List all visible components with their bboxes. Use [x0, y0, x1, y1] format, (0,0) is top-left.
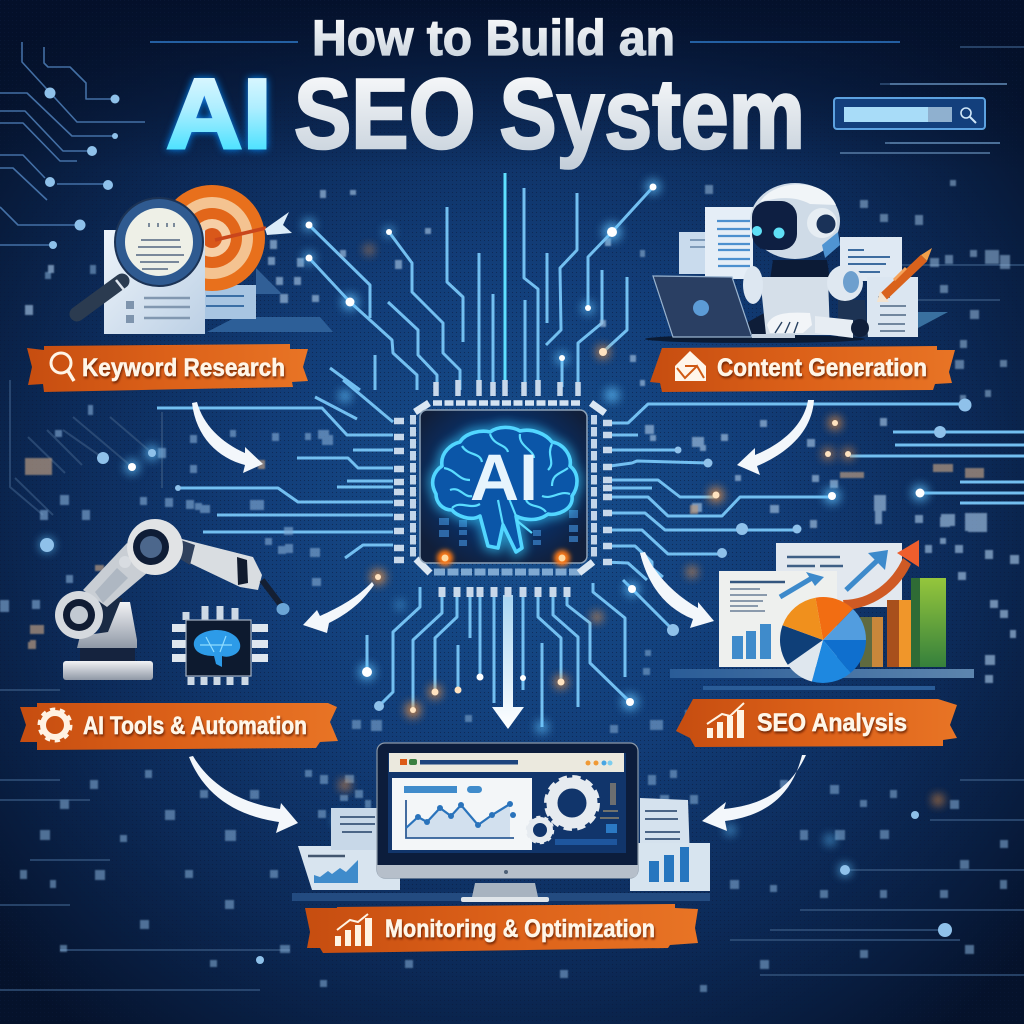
- data blocks inside chip: [439, 510, 578, 549]
- gears: [528, 778, 597, 842]
- arrow: chip to monitoring: [492, 595, 524, 729]
- icon: monitor with dashboards: [292, 743, 710, 902]
- icon: search: [51, 353, 74, 381]
- robot head: [750, 183, 840, 259]
- connector arrows: [189, 400, 814, 833]
- chip pins: [394, 380, 612, 597]
- arrow: chip to AI tools: [303, 582, 374, 633]
- icon: growth chart: [707, 703, 744, 738]
- arrow: chip to SEO analysis: [640, 552, 714, 628]
- robot body: [743, 260, 869, 338]
- icon: robot with laptop: [645, 183, 948, 343]
- label: keyword research: Keyword Research: [82, 354, 285, 382]
- icon: gear: [40, 710, 70, 740]
- banner: content generation: [650, 346, 955, 392]
- data particles: [0, 180, 1019, 992]
- panel: SEO analysis: [670, 540, 974, 747]
- arrow: AI tools to monitoring: [189, 756, 298, 833]
- banner: keyword research: [27, 344, 308, 392]
- label: monitoring and optimization: Monitoring & Optimization: [385, 915, 655, 943]
- title: AI SEO System: AI: [166, 58, 272, 169]
- banner: monitoring and optimization: [305, 904, 698, 953]
- icon: envelope: [675, 351, 706, 381]
- glowing nodes: [40, 88, 972, 964]
- panel: keyword research: [27, 185, 333, 392]
- banner: SEO analysis: [676, 699, 957, 747]
- icon: mini AI chip: [172, 606, 268, 685]
- label: content generation: Content Generation: [717, 354, 927, 382]
- panel: monitoring and optimization: [292, 743, 710, 953]
- chip pad ring: [413, 403, 605, 573]
- arrow: keyword research to chip: [192, 402, 263, 473]
- label: AI tools and automation: AI Tools & Automation: [83, 712, 307, 740]
- icon: reports, pie chart and bars: [670, 540, 974, 688]
- label: SEO analysis: SEO Analysis: [757, 709, 907, 737]
- panel: AI tools and automation: [20, 519, 338, 750]
- AI letters on chip: AI: [470, 440, 538, 514]
- central AI chip: [394, 380, 612, 597]
- chip orange lights: [437, 550, 570, 566]
- title: How to Build an: How to Build an: [312, 10, 675, 66]
- search bar icon: [834, 84, 1007, 153]
- icon: growth chart: [335, 914, 372, 946]
- laptop: [653, 276, 795, 338]
- arrow: content generation to chip: [737, 400, 814, 475]
- icon: robot arm with chip: [55, 519, 290, 680]
- pencil: [877, 248, 932, 302]
- banner: AI tools and automation: [20, 703, 338, 750]
- brain: [433, 427, 577, 552]
- title: AI SEO System: SEO System: [294, 58, 805, 169]
- chip core: [420, 410, 587, 563]
- icon: target and magnifier: [77, 185, 333, 334]
- pie chart: [780, 597, 866, 683]
- panel: content generation: [645, 183, 955, 392]
- arrow: SEO analysis to monitoring: [702, 755, 806, 831]
